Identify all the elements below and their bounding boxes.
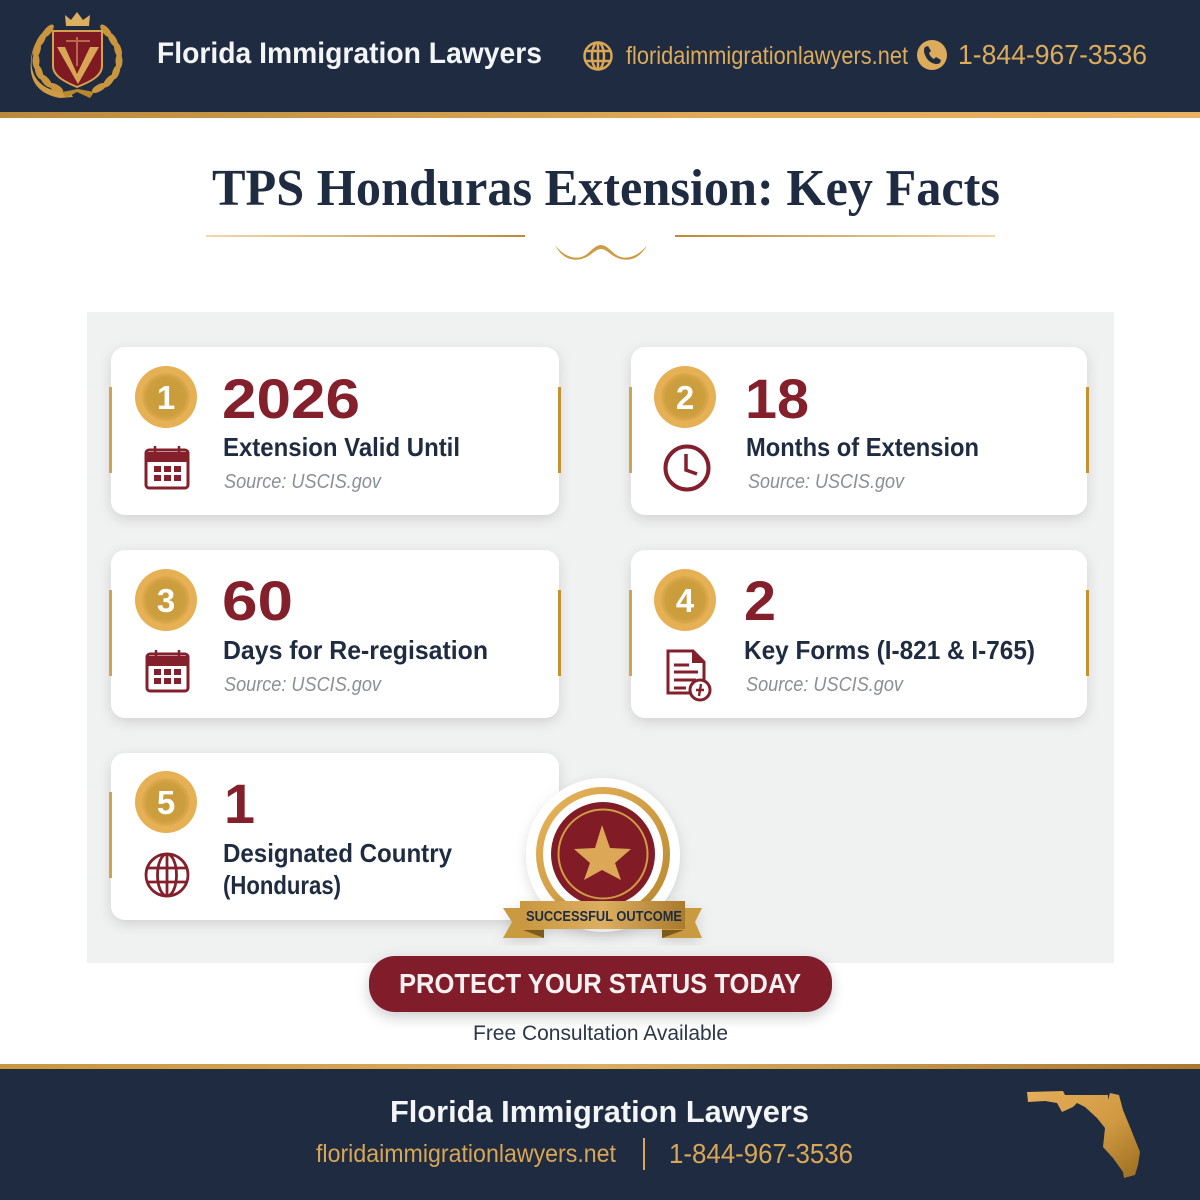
label: Months of Extension	[746, 432, 979, 462]
number badge 3	[135, 569, 197, 631]
successful outcome seal	[503, 778, 702, 938]
source: Source: USCIS.gov	[224, 471, 382, 493]
footer firm name: Florida Immigration Lawyers	[390, 1094, 809, 1129]
fact card 5	[109, 753, 559, 920]
icon: document with badge	[668, 651, 710, 700]
title: TPS Honduras Extension: Key Facts	[212, 160, 1000, 217]
header band	[0, 0, 1200, 118]
number badge 1: 1	[157, 379, 175, 416]
value 18: 18	[745, 367, 809, 430]
call to action button	[369, 956, 832, 1012]
source: Source: USCIS.gov	[224, 674, 382, 696]
number badge 5: 5	[157, 784, 175, 821]
ribbon text: SUCCESSFUL OUTCOME	[526, 909, 682, 925]
label: Days for Re-regisation	[223, 635, 488, 665]
icon: calendar	[146, 446, 188, 488]
icon: calendar	[147, 650, 188, 691]
footer phone: 1-844-967-3536	[669, 1138, 853, 1169]
fact card 4	[629, 550, 1089, 718]
number badge 4: 4	[676, 582, 695, 619]
number badge 2: 2	[676, 379, 694, 416]
label: Extension Valid Until	[223, 432, 460, 462]
icon: globe	[584, 42, 612, 70]
ribbon	[503, 901, 702, 938]
label continuation: (Honduras)	[223, 870, 341, 900]
facts panel background	[87, 312, 1114, 963]
icon: star	[574, 825, 631, 880]
value 1: 1	[224, 772, 255, 835]
footer divider	[643, 1138, 645, 1170]
value 60: 60	[222, 569, 293, 632]
header phone number: 1-844-967-3536	[958, 39, 1147, 70]
label: Designated Country	[223, 838, 452, 868]
button text: PROTECT YOUR STATUS TODAY	[399, 968, 801, 999]
icon: globe	[146, 854, 188, 896]
icon: clock	[666, 446, 708, 490]
consultation note: Free Consultation Available	[473, 1022, 728, 1045]
fact card 3	[109, 550, 561, 718]
title divider ornament	[206, 235, 995, 260]
icon: firm crest logo	[31, 12, 123, 98]
number badge 2	[654, 366, 716, 428]
number badge 5	[135, 771, 197, 833]
icon: phone	[917, 40, 947, 70]
number badge 3: 3	[157, 582, 175, 619]
fact card 2	[629, 347, 1089, 515]
header firm name: Florida Immigration Lawyers	[157, 37, 542, 70]
value 2: 2	[744, 569, 776, 632]
number badge 1	[135, 366, 197, 428]
header website: floridaimmigrationlawyers.net	[626, 42, 908, 70]
footer band	[0, 1064, 1200, 1200]
label: Key Forms (I-821 & I-765)	[744, 635, 1035, 665]
fact card 1	[109, 347, 561, 515]
source: Source: USCIS.gov	[748, 471, 905, 493]
value 2026: 2026	[222, 367, 360, 430]
source: Source: USCIS.gov	[746, 674, 904, 696]
footer website: floridaimmigrationlawyers.net	[316, 1140, 616, 1168]
icon: Florida map	[1027, 1091, 1140, 1178]
number badge 4	[654, 569, 716, 631]
